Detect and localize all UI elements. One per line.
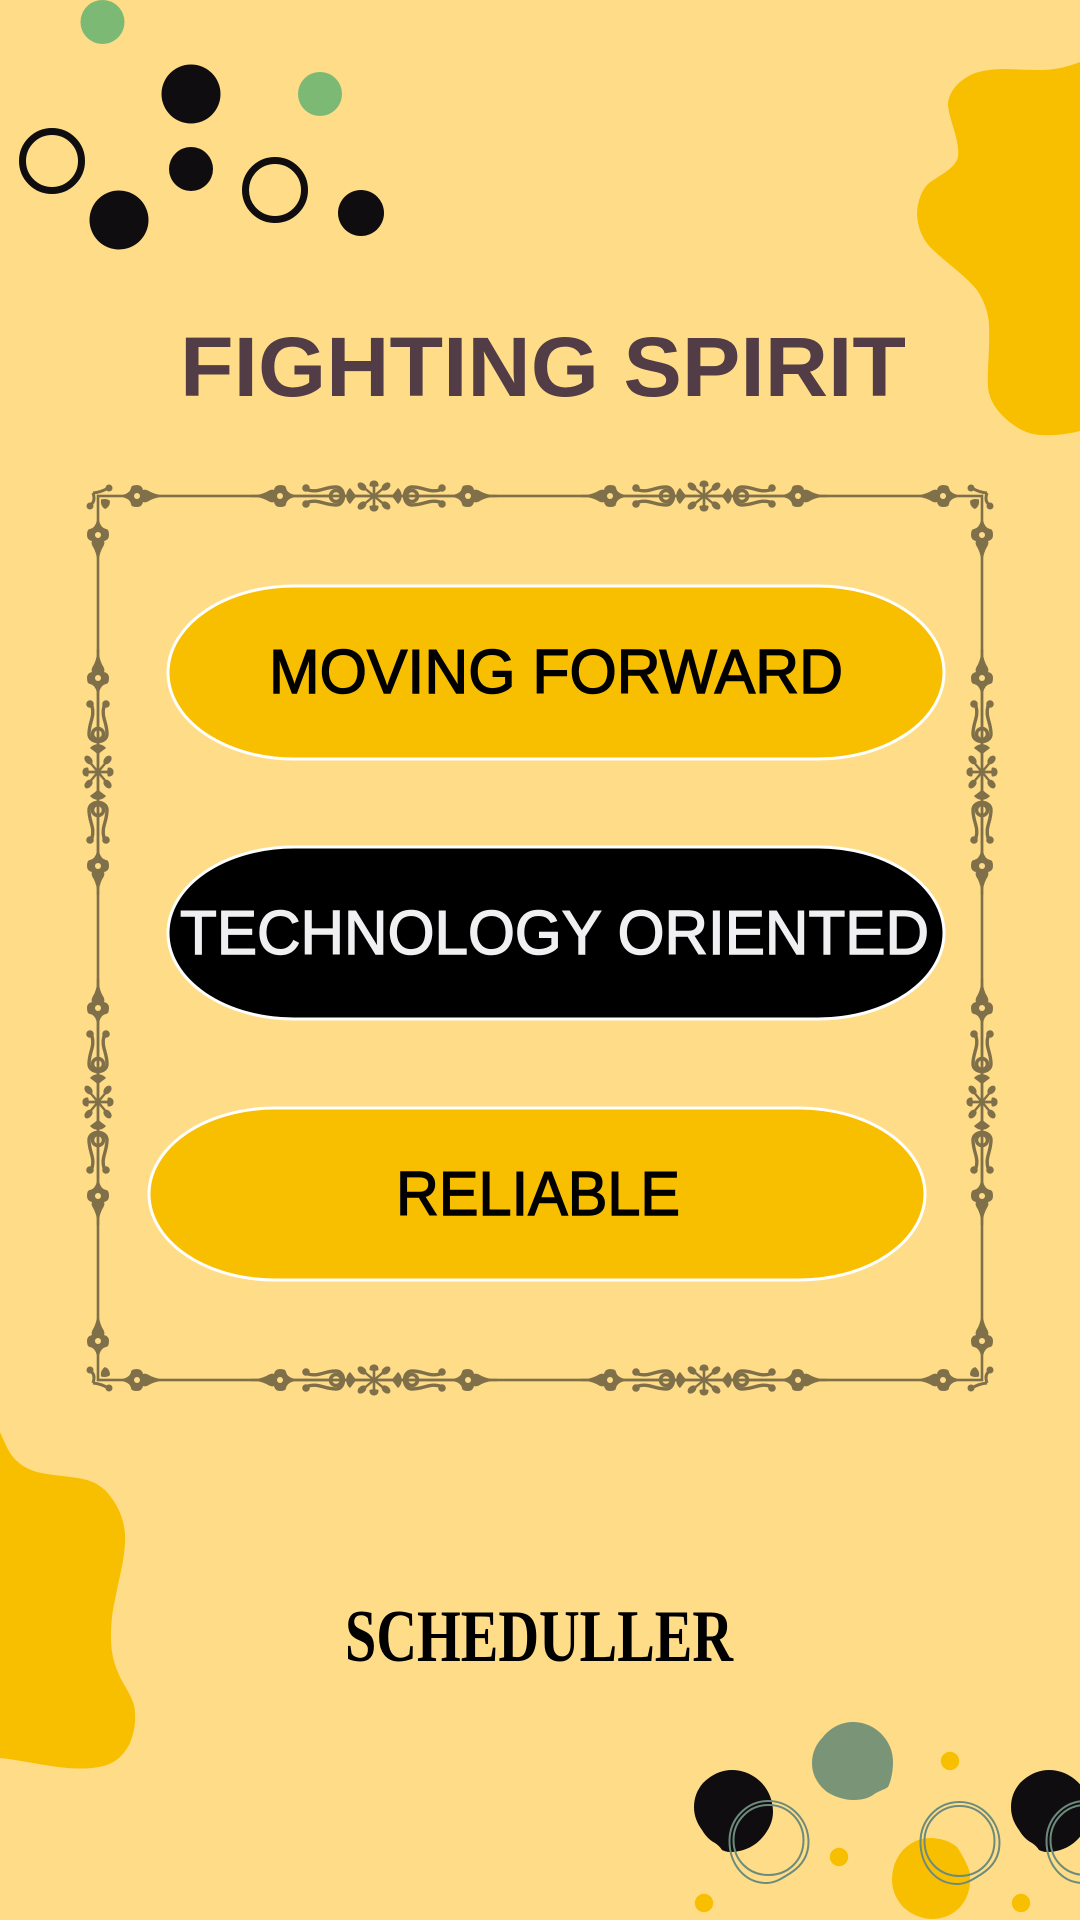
pill: moving forward [168, 586, 944, 759]
decorative dots top left [22, 0, 384, 250]
decorative shapes bottom right [694, 1722, 1080, 1919]
ornamental frame [82, 480, 998, 1396]
pill: technology oriented [168, 847, 944, 1019]
pill: technology oriented: TECHNOLOGY ORIENTED [180, 899, 929, 968]
blob bottom left [0, 1432, 135, 1769]
pill: moving forward: MOVING FORWARD [269, 638, 843, 707]
blob top right [917, 62, 1080, 435]
title: FIGHTING SPIRIT [180, 320, 906, 414]
brand name: SCHEDULLER [345, 1596, 734, 1678]
pill: reliable: RELIABLE [396, 1160, 680, 1229]
pill: reliable [149, 1108, 925, 1280]
